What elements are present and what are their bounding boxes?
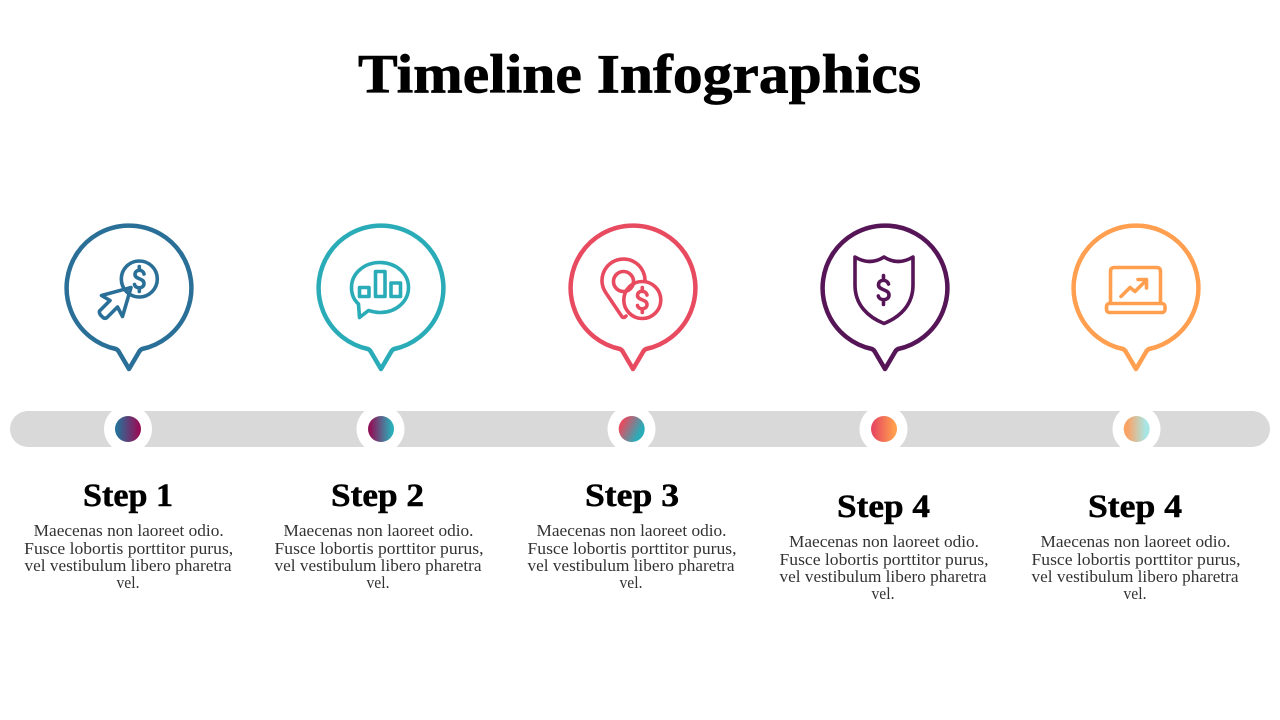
description: step 5: vel vestibulum libero pharetra	[1032, 567, 1239, 586]
icon: location bubble with laptop and growth arrow	[1074, 226, 1198, 369]
description: step 4: Maecenas non laoreet odio.	[789, 532, 979, 551]
icon: location bubble with cursor and dollar coin	[67, 226, 191, 369]
description: step 3	[528, 521, 736, 592]
description: step 2	[274, 521, 484, 592]
timeline marker 1	[104, 405, 152, 453]
timeline marker 5	[1112, 405, 1160, 453]
description: step 3: vel.	[620, 573, 642, 592]
description: step 3: Fusce lobortis porttitor purus,	[528, 539, 736, 558]
description: step 2: Maecenas non laoreet odio.	[284, 521, 474, 540]
panel: step 5	[1032, 226, 1240, 603]
heading: step 4: Step 4	[837, 489, 930, 525]
description: step 5: vel.	[1124, 584, 1146, 603]
timeline bar	[10, 411, 1270, 447]
description: step 1: vel.	[116, 573, 140, 592]
description: step 3: Maecenas non laoreet odio.	[536, 521, 726, 540]
heading: step 2: Step 2	[331, 478, 424, 514]
timeline marker 4	[860, 405, 908, 453]
panel: step 2	[274, 226, 484, 592]
description: step 2: Fusce lobortis porttitor purus,	[274, 539, 484, 558]
timeline marker 3	[608, 405, 656, 453]
panel: step 3	[528, 226, 736, 592]
panel: step 1	[24, 226, 233, 592]
description: step 1: vel vestibulum libero pharetra	[24, 556, 232, 575]
icon: location bubble with map pin and dollar coin	[571, 226, 695, 369]
description: step 2: vel.	[366, 573, 390, 592]
description: step 1: Fusce lobortis porttitor purus,	[24, 539, 233, 558]
description: step 2: vel vestibulum libero pharetra	[274, 556, 482, 575]
title: Timeline Infographics	[358, 44, 921, 104]
description: step 5: Maecenas non laoreet odio.	[1040, 532, 1230, 551]
heading: step 3: Step 3	[585, 478, 679, 514]
timeline marker 2	[356, 405, 404, 453]
icon: location bubble with chart speech bubble	[319, 226, 443, 369]
description: step 4: vel.	[872, 584, 894, 603]
description: step 4	[780, 532, 988, 603]
description: step 4: vel vestibulum libero pharetra	[780, 567, 987, 586]
description: step 5	[1032, 532, 1240, 603]
description: step 3: vel vestibulum libero pharetra	[528, 556, 735, 575]
heading: step 5: Step 4	[1088, 489, 1182, 525]
description: step 1: Maecenas non laoreet odio.	[34, 521, 224, 540]
icon: location bubble with dollar shield	[823, 226, 947, 369]
description: step 5: Fusce lobortis porttitor purus,	[1032, 550, 1240, 569]
description: step 4: Fusce lobortis porttitor purus,	[780, 550, 988, 569]
panel: step 4	[780, 226, 988, 603]
heading: step 1: Step 1	[83, 478, 173, 514]
description: step 1	[24, 521, 233, 592]
